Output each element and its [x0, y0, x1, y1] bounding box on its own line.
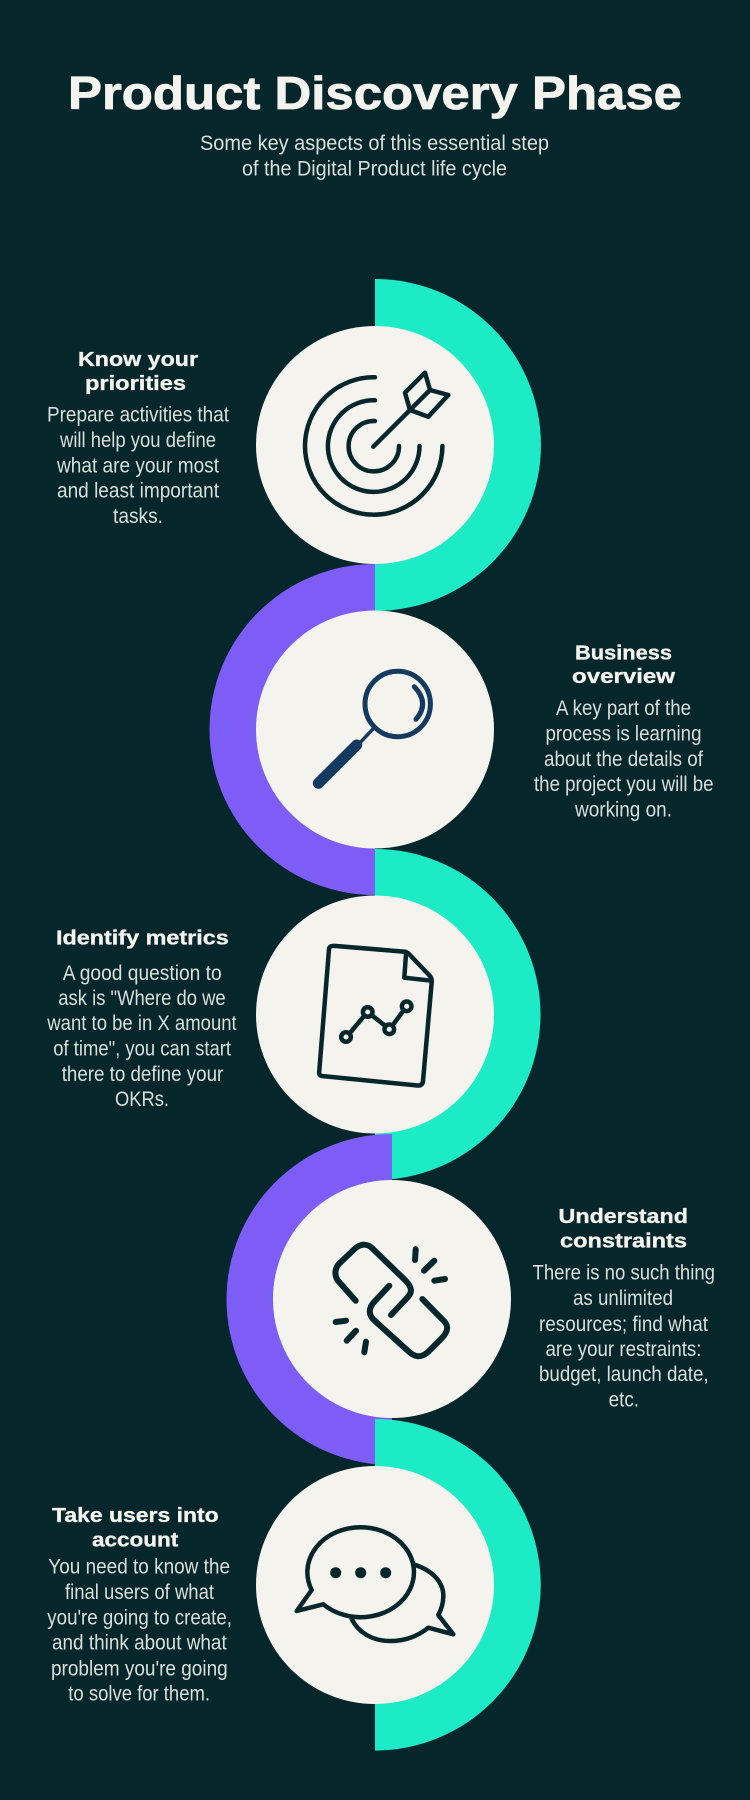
body text: what are your most: [56, 454, 219, 478]
heading: account: [92, 1530, 179, 1552]
body text: [47, 404, 229, 528]
teal half ring: [375, 279, 541, 611]
body text: the project you will be: [534, 773, 714, 796]
body text: final users of what: [65, 1581, 214, 1604]
body text: A good question to: [63, 962, 222, 985]
body text: ask is "Where do we: [58, 987, 226, 1010]
icon: document with line chart: [319, 946, 432, 1086]
teal half ring: [375, 1419, 541, 1750]
icon: target with arrow: [305, 373, 448, 515]
circle: [256, 326, 494, 564]
heading: [52, 1505, 219, 1552]
body text: problem you're going: [51, 1657, 228, 1680]
circle: [256, 1466, 494, 1704]
teal half ring: [375, 849, 540, 1180]
panel: know your priorities: [47, 279, 541, 611]
heading: Take users into: [52, 1505, 219, 1527]
heading: [572, 642, 676, 688]
body text: tasks.: [113, 505, 163, 528]
heading: [78, 349, 198, 395]
icon: chat bubbles: [297, 1527, 453, 1641]
body text: working on.: [574, 798, 672, 821]
body text: A key part of the: [556, 697, 691, 720]
body text: [534, 697, 714, 821]
body text: as unlimited: [573, 1287, 673, 1310]
body text: etc.: [609, 1388, 639, 1412]
body text: and think about what: [52, 1632, 227, 1655]
body text: [532, 1262, 715, 1412]
circle: [256, 896, 494, 1134]
purple half ring: [226, 1134, 392, 1465]
body text: will help you define: [59, 429, 216, 452]
body text: to solve for them.: [68, 1682, 210, 1705]
body text: Prepare activities that: [47, 404, 229, 426]
panel: identify metrics: [46, 849, 540, 1180]
body text: about the details of: [544, 748, 703, 771]
circle: [256, 610, 494, 848]
body text: are your restraints:: [546, 1338, 702, 1361]
heading: priorities: [85, 373, 186, 395]
purple half ring: [210, 564, 375, 895]
heading: [558, 1206, 688, 1252]
heading: Identify metrics: [56, 928, 229, 950]
body text: budget, launch date,: [539, 1363, 709, 1386]
subtitle: [200, 132, 549, 180]
heading: Understand: [558, 1206, 688, 1228]
body text: resources; find what: [539, 1313, 708, 1336]
circle: [273, 1180, 511, 1418]
body text: [46, 962, 237, 1111]
icon: broken chain link: [335, 1245, 447, 1356]
body text: you're going to create,: [47, 1607, 232, 1630]
body text: OKRs.: [115, 1088, 169, 1111]
body text: and least important: [57, 480, 219, 502]
icon: magnifying glass: [318, 671, 430, 783]
heading: constraints: [560, 1230, 687, 1252]
panel: take users into account: [47, 1419, 541, 1750]
heading: overview: [572, 666, 676, 688]
body text: process is learning: [546, 723, 702, 746]
body text: You need to know the: [48, 1555, 230, 1578]
body text: There is no such thing: [532, 1262, 715, 1285]
body text: there to define your: [62, 1063, 223, 1086]
panel: understand constraints: [226, 1134, 715, 1465]
heading: Business: [575, 642, 672, 664]
title: Product Discovery Phase: [68, 67, 682, 119]
subtitle: Some key aspects of this essential step: [200, 132, 549, 155]
subtitle: of the Digital Product life cycle: [242, 158, 507, 180]
panel: business overview: [210, 564, 714, 895]
body text: want to be in X amount: [46, 1012, 237, 1035]
body text: of time", you can start: [53, 1038, 231, 1061]
body text: [47, 1555, 232, 1705]
heading: Know your: [78, 349, 198, 371]
